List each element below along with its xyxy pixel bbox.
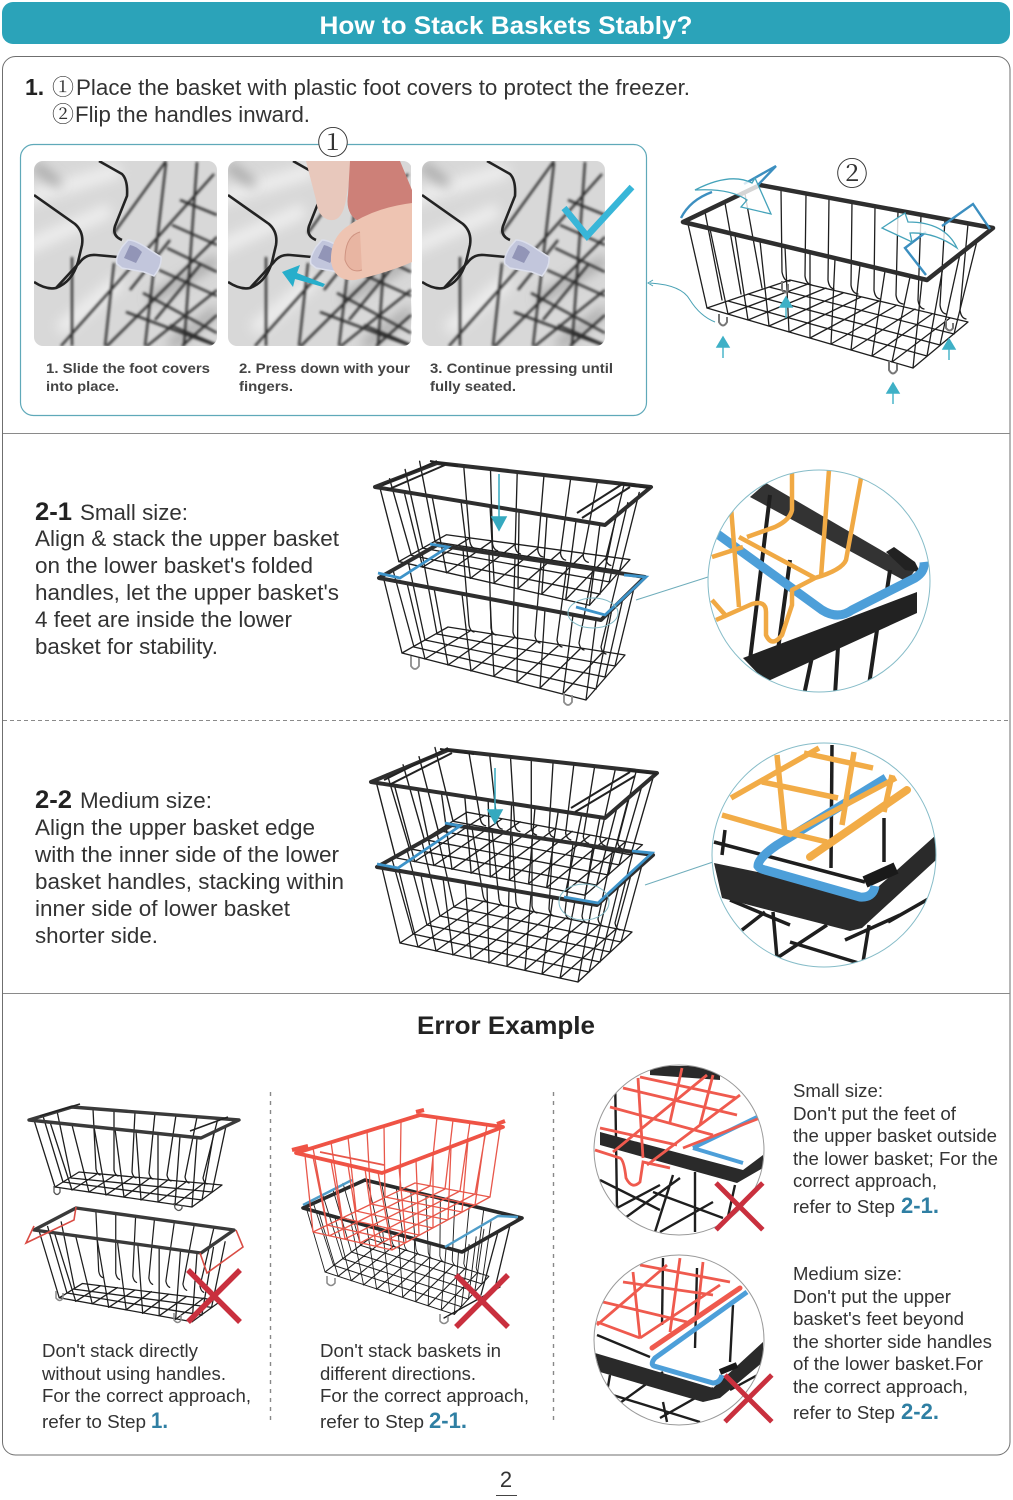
photo: press with fingers — [214, 161, 412, 346]
foot arrows — [717, 297, 955, 404]
upper basket — [29, 1104, 239, 1210]
step 2-1 text: on the lower basket's folded — [35, 553, 313, 578]
page number: 2 — [500, 1467, 512, 1492]
error 3 text: 2-1. — [901, 1193, 939, 1218]
error 4 detail: medium size — [594, 1255, 772, 1425]
error 2 text: different directions. — [320, 1363, 476, 1384]
error 4 text: of the lower basket.For — [793, 1353, 983, 1374]
step 1 instructions: Place the basket with plastic foot covers to protect the freezer. — [76, 75, 690, 100]
panel: foot cover steps — [20, 118, 646, 416]
upper red basket — [292, 1110, 505, 1250]
step 2-2 text: 2-2 — [35, 786, 72, 814]
heading: error example: Error Example — [417, 1012, 595, 1040]
caption 2 — [239, 360, 411, 394]
step 2-2 text: basket handles, stacking within — [35, 869, 344, 894]
header bar — [2, 2, 1010, 44]
step 2-1 text: basket for stability. — [35, 634, 218, 659]
step 2-2 text: inner side of lower basket — [35, 896, 290, 921]
stacked medium baskets — [371, 746, 657, 982]
error 1 text: refer to Step — [42, 1411, 146, 1432]
error 1 text: For the correct approach, — [42, 1385, 251, 1406]
upper basket — [371, 746, 657, 897]
error 3 text: Don't put the feet of — [793, 1103, 957, 1124]
basket illustration: flip handles — [681, 166, 993, 404]
error 1 text: 1. — [151, 1408, 168, 1433]
error 2 text: 2-1. — [429, 1408, 467, 1433]
icon: check mark — [564, 187, 632, 236]
error 4 text: Medium size: — [793, 1263, 902, 1284]
error 1 text: without using handles. — [41, 1363, 226, 1384]
caption 2: fingers. — [239, 378, 293, 394]
magnified detail: small size — [708, 470, 930, 695]
error 3 text: correct approach, — [793, 1170, 937, 1191]
magnified detail: medium size — [712, 743, 936, 967]
error 4 text: basket's feet beyond — [793, 1308, 964, 1329]
step 1 instructions: 1. — [25, 74, 44, 100]
error 1 text: Don't stack directly — [42, 1340, 199, 1361]
error 4 text: the shorter side handles — [793, 1331, 992, 1352]
down arrow — [492, 474, 506, 530]
step 2-2 text — [34, 786, 344, 948]
error 1: stacked without handles — [26, 1104, 243, 1323]
step 2-2 text: Medium size: — [80, 788, 212, 813]
error 2 text: refer to Step — [320, 1411, 424, 1432]
caption 3: fully seated. — [430, 378, 516, 394]
step 2-1 text: Align & stack the upper basket — [35, 526, 339, 551]
step 2-1 text: Small size: — [80, 500, 188, 525]
step 2-1 text: handles, let the upper basket's — [35, 580, 339, 605]
upper basket — [375, 457, 651, 609]
error 3 text: refer to Step — [793, 1196, 895, 1217]
number badge 2: ② — [836, 149, 868, 195]
lower basket — [377, 823, 653, 982]
handles in blue — [681, 166, 990, 275]
step 2-2 text: Align the upper basket edge — [35, 815, 315, 840]
error 1 text — [41, 1340, 251, 1433]
header bar: How to Stack Baskets Stably? — [320, 12, 692, 40]
error 3 text: the lower basket; For the — [793, 1148, 998, 1169]
callout line — [636, 577, 708, 600]
red x — [725, 1375, 772, 1422]
lower basket — [378, 544, 646, 705]
arrow: from foot to panel — [648, 280, 715, 322]
number badge 1: ① — [317, 118, 349, 164]
step 1 instructions: ② — [52, 98, 74, 129]
photo: slide foot cover — [20, 161, 217, 346]
error 2 text — [320, 1340, 529, 1433]
curved arrow left — [695, 178, 771, 214]
error 3 text — [793, 1080, 998, 1218]
step 1 instructions: Flip the handles inward. — [75, 102, 310, 127]
step 2-2 text: with the inner side of the lower — [34, 842, 339, 867]
red x — [456, 1275, 508, 1327]
stacked small baskets — [375, 457, 651, 705]
caption 3 — [430, 360, 613, 394]
step 2-1 text: 2-1 — [35, 498, 72, 526]
caption 2: 2. Press down with your — [239, 360, 411, 376]
step 2-2 text: shorter side. — [35, 923, 158, 948]
error 3 text: the upper basket outside — [793, 1125, 997, 1146]
error 2: different directions — [292, 1110, 522, 1327]
error 3 text: Small size: — [793, 1080, 883, 1101]
error 3 detail: small size — [594, 1065, 764, 1235]
error 4 text — [793, 1263, 992, 1424]
caption 1 — [46, 360, 210, 394]
lower basket — [26, 1207, 243, 1323]
step 1 instructions — [25, 71, 690, 129]
caption 3: 3. Continue pressing until — [430, 360, 613, 376]
callout line — [645, 862, 713, 885]
error 4 text: Don't put the upper — [793, 1286, 951, 1307]
red x — [188, 1270, 240, 1322]
curved arrow right — [882, 213, 957, 248]
step 2-1 text — [35, 498, 339, 659]
down arrow — [488, 768, 502, 823]
error 4 text: refer to Step — [793, 1402, 895, 1423]
step 1 instructions: ① — [52, 71, 74, 102]
error 4 text: 2-2. — [901, 1399, 939, 1424]
error 4 text: the correct approach, — [793, 1376, 968, 1397]
red x — [716, 1183, 763, 1230]
lower black basket — [303, 1180, 522, 1324]
error 2 text: Don't stack baskets in — [320, 1340, 501, 1361]
photo: fully seated with check mark — [408, 161, 605, 346]
caption 1: into place. — [46, 378, 119, 394]
page number — [496, 1467, 517, 1496]
step 2-1 text: 4 feet are inside the lower — [35, 607, 292, 632]
caption 1: 1. Slide the foot covers — [46, 360, 210, 376]
error 2 text: For the correct approach, — [320, 1385, 529, 1406]
